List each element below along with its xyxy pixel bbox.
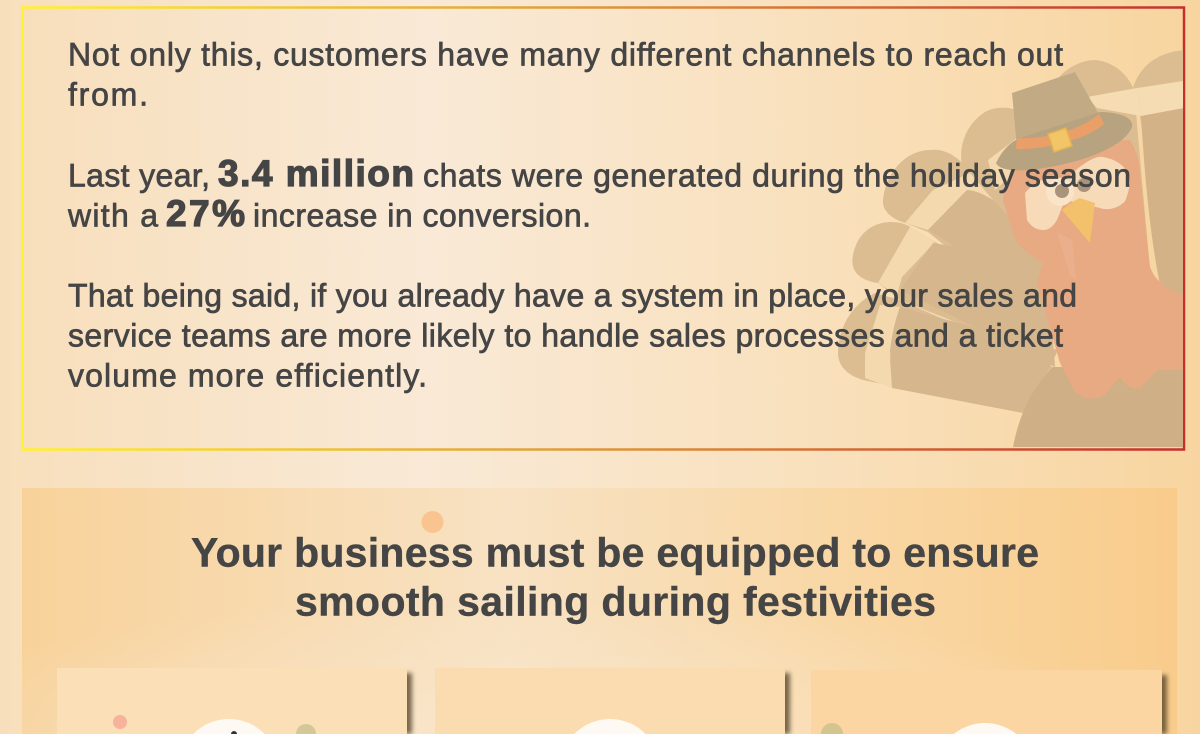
panel: equipped section bbox=[22, 488, 1177, 734]
heading bbox=[191, 530, 1039, 624]
eye patches bbox=[1025, 157, 1130, 230]
body bbox=[1013, 367, 1190, 447]
text block: chats statistic: Last year, bbox=[68, 158, 210, 194]
text block: chats statistic bbox=[67, 153, 1131, 234]
decorative dot: olive bbox=[296, 724, 316, 734]
hat bbox=[1012, 72, 1098, 140]
feather four bbox=[961, 108, 1016, 213]
text block: channels: from. bbox=[68, 76, 148, 112]
text block: channels bbox=[68, 36, 1063, 112]
feather six bbox=[1133, 50, 1183, 130]
wattle bbox=[1057, 232, 1076, 280]
text block: system in place: volume more efficiently. bbox=[68, 358, 427, 394]
feather five bbox=[1058, 60, 1148, 246]
card 2 bbox=[435, 668, 790, 734]
decorative dot: olive bbox=[821, 723, 843, 734]
text block: chats statistic: 27% bbox=[166, 193, 245, 234]
decorative dot: pink bbox=[113, 715, 127, 729]
text block: system in place bbox=[68, 278, 1077, 394]
text block: chats statistic: 3.4 million bbox=[218, 153, 414, 194]
feather one bbox=[838, 293, 1053, 386]
feather two bbox=[852, 222, 975, 328]
card 1 bbox=[57, 668, 412, 734]
illustration: turkey with pilgrim hat bbox=[838, 50, 1190, 447]
head and neck bbox=[1003, 140, 1190, 398]
text block: channels: Not only this, customers have many different channels to reach out bbox=[68, 36, 1063, 72]
text block: chats statistic: with a bbox=[67, 198, 158, 234]
icon circle bbox=[954, 723, 1016, 734]
text block: system in place: That being said, if you already have a system in place, your sales and bbox=[68, 278, 1077, 314]
icon circle bbox=[574, 719, 646, 734]
heading: Your business must be equipped to ensure bbox=[191, 530, 1039, 576]
heading: smooth sailing during festivities bbox=[295, 578, 936, 624]
icon circle bbox=[193, 719, 265, 734]
panel: channels text box bbox=[22, 8, 1190, 450]
text block: system in place: service teams are more likely to handle sales processes and a ticket bbox=[68, 318, 1063, 354]
text block: chats statistic: increase in conversion. bbox=[253, 198, 591, 234]
card 3 bbox=[811, 670, 1167, 734]
text block: chats statistic: chats were generated during the holiday season bbox=[423, 158, 1131, 194]
beak bbox=[1062, 198, 1095, 243]
decorative dot: orange bbox=[422, 511, 444, 533]
icon detail bbox=[231, 731, 237, 734]
feather three bbox=[883, 150, 964, 246]
